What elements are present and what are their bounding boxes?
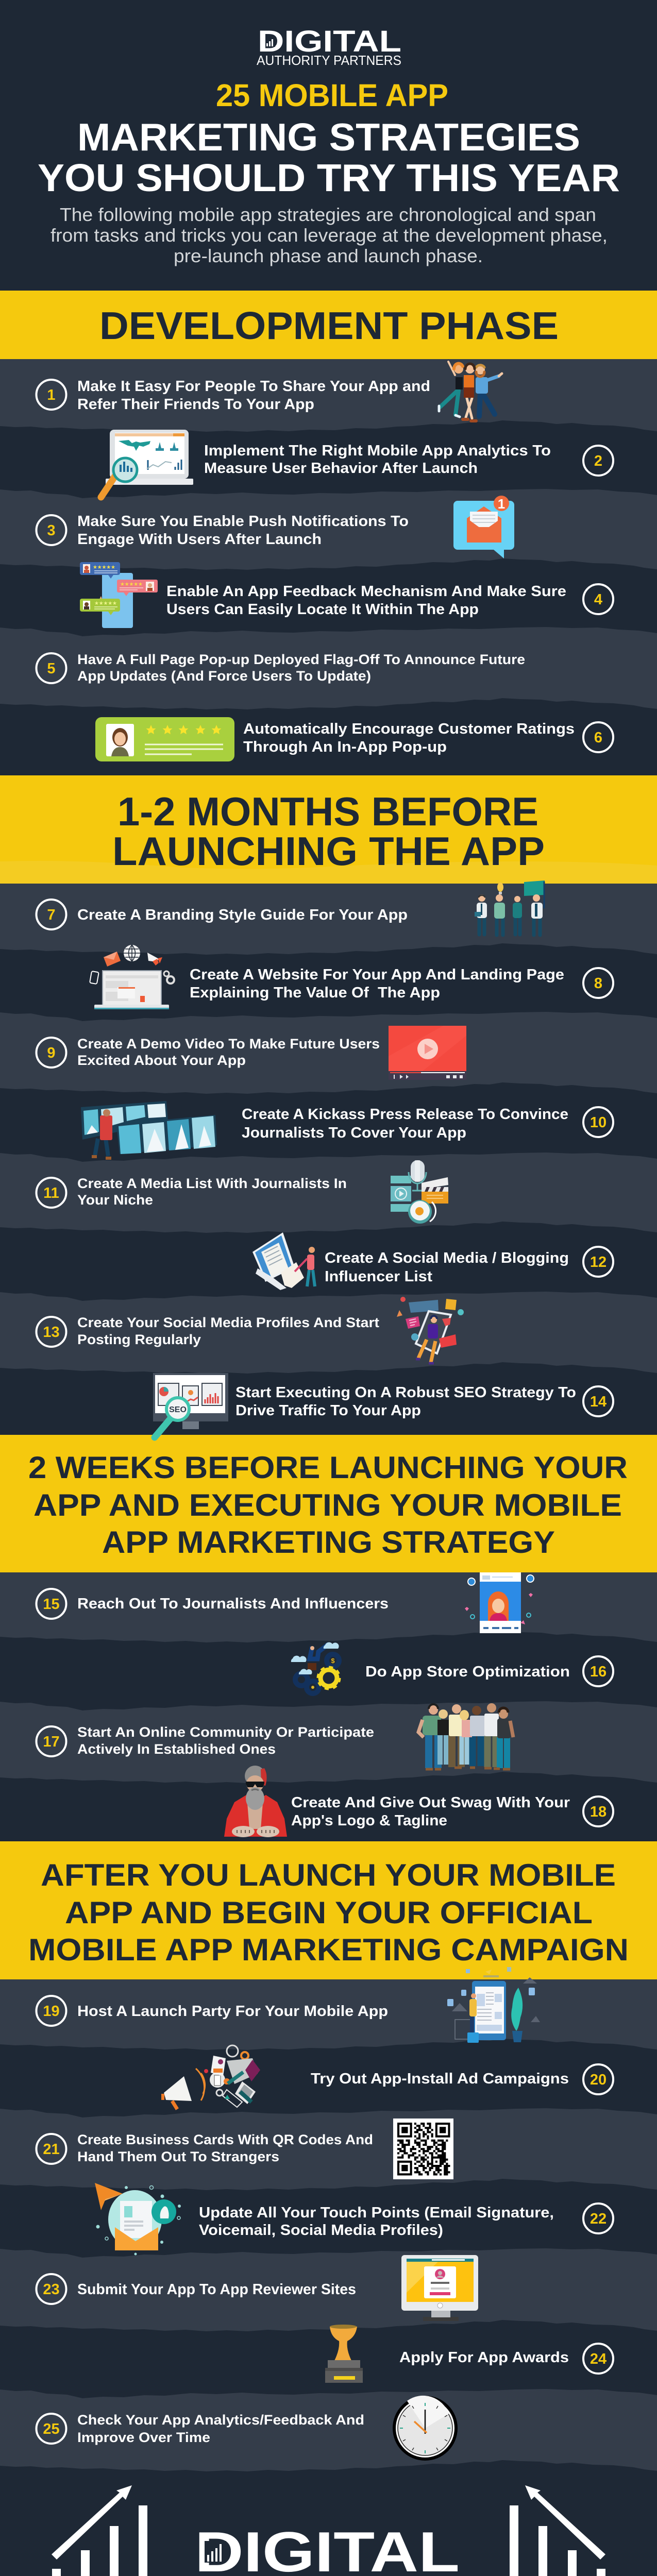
logo: header: DIGITAL	[258, 25, 401, 58]
text: strategy 11: Your Niche	[77, 1192, 153, 1208]
text: strategy 14	[235, 1384, 576, 1419]
text: strategy 21: Hand Them Out To Strangers	[77, 2149, 279, 2164]
number badge 20	[583, 2064, 613, 2094]
text: strategy 17	[77, 1724, 374, 1757]
heading: 2 weeks before launching	[0, 1435, 657, 1572]
number badge 16	[583, 1656, 613, 1686]
strategy 10	[81, 1101, 613, 1158]
text: strategy 25: Improve Over Time	[77, 2430, 210, 2445]
text: strategy 14: Start Executing On A Robust SEO Strategy To	[235, 1384, 576, 1401]
text: strategy 24: Apply For App Awards	[399, 2349, 569, 2366]
panel: development phase bands	[0, 359, 657, 776]
text: strategy 12: Influencer List	[325, 1268, 432, 1285]
number badge 21: 21	[43, 2141, 60, 2158]
number badge 6	[583, 722, 613, 752]
heading: development phase: DEVELOPMENT PHASE	[99, 304, 559, 347]
icon: QR code	[393, 2119, 453, 2179]
text: strategy 22: Update All Your Touch Points (Email Signature,	[199, 2205, 554, 2221]
icon: team with flag and bulb	[475, 880, 545, 935]
text: strategy 18	[291, 1794, 570, 1829]
number badge 12	[583, 1247, 613, 1277]
number badge 19	[36, 1996, 66, 2026]
text: strategy 7: Create A Branding Style Guide For Your App	[77, 907, 408, 923]
number badge 2: 2	[594, 453, 602, 469]
strategy 24	[325, 2325, 613, 2383]
icon: notification envelope bubble: 1	[498, 496, 505, 512]
number badge 18: 18	[590, 1804, 607, 1820]
text: strategy 9	[77, 1036, 380, 1068]
text: strategy 2: Measure User Behavior After Launch	[204, 460, 478, 477]
text: strategy 13: Create Your Social Media Profiles And Start	[77, 1315, 379, 1330]
icon: trophy	[325, 2325, 363, 2383]
strategy 12	[252, 1232, 613, 1290]
strategy 7	[36, 880, 545, 935]
text: strategy 22: Voicemail, Social Media Profiles)	[199, 2222, 443, 2239]
icon: laptop with analytics and magnifier	[101, 430, 193, 497]
intro paragraph: from tasks and tricks you can leverage at the development phase,	[50, 225, 608, 246]
text: strategy 8	[190, 967, 564, 1001]
heading: after you launch: MOBILE APP MARKETING CAMPAIGN	[28, 1933, 629, 1967]
icon: review site monitor	[401, 2255, 478, 2321]
icon: gears and clouds: $	[331, 1657, 335, 1665]
text: strategy 13: Posting Regularly	[77, 1332, 201, 1347]
number badge 23	[36, 2274, 66, 2304]
number badge 22: 22	[590, 2211, 607, 2227]
text: strategy 2	[204, 443, 551, 477]
text: strategy 8: Explaining The Value Of The App	[190, 985, 440, 1001]
intro paragraph: pre-launch phase and launch phase.	[174, 245, 483, 266]
panel: after launch bands	[0, 1979, 657, 2535]
number badge 17: 17	[43, 1734, 60, 1750]
title: main heading	[38, 115, 620, 199]
title: 25 mobile app: 25 MOBILE APP	[216, 78, 448, 113]
icon: phone with review cards: ★★★★★	[120, 582, 143, 587]
text: strategy 1	[77, 378, 430, 413]
number badge 11: 11	[43, 1185, 59, 1201]
text: strategy 6: Through An In-App Pop-up	[243, 739, 447, 755]
icon: bearded man in red hoodie	[224, 1766, 287, 1837]
icon: gears and clouds	[291, 1642, 340, 1693]
number badge 8	[583, 968, 613, 998]
text: strategy 4	[166, 583, 566, 618]
text: strategy 25	[77, 2412, 364, 2445]
icon: media mic, clapper and camera	[391, 1160, 448, 1224]
text: strategy 17: Actively In Established Ones	[77, 1741, 276, 1757]
text: strategy 5	[77, 652, 525, 684]
number badge 7: 7	[47, 907, 56, 923]
icon: SEO monitor and magnifier	[153, 1373, 228, 1437]
number badge 9: 9	[47, 1045, 56, 1061]
heading: 2 weeks before launching: APP AND EXECUTING YOUR MOBILE	[33, 1488, 622, 1522]
icon: mail, paper plane and bell	[95, 2183, 181, 2256]
text: strategy 3	[77, 513, 409, 548]
number badge 15	[36, 1589, 66, 1619]
text: strategy 10	[242, 1106, 568, 1141]
number badge 21	[36, 2134, 66, 2164]
footer chart: left bars and arrow	[52, 2485, 147, 2576]
number badge 15: 15	[43, 1596, 60, 1613]
text: strategy 5: Have A Full Page Pop-up Deployed Flag-Off To Announce Future	[77, 652, 525, 667]
strategy 11	[36, 1160, 448, 1224]
text: strategy 11	[77, 1176, 347, 1208]
number badge 20: 20	[590, 2072, 607, 2088]
text: strategy 11: Create A Media List With Journalists In	[77, 1176, 347, 1191]
strategy 21	[36, 2119, 453, 2179]
icon: phone with review cards: ★★★★★	[94, 601, 117, 606]
logo: header: AUTHORITY PARTNERS	[257, 53, 401, 68]
text: strategy 6	[243, 721, 575, 755]
heading: after you launch: AFTER YOU LAUNCH YOUR MOBILE	[41, 1858, 616, 1892]
text: strategy 22	[199, 2205, 554, 2239]
icon: phone with review cards	[80, 562, 158, 628]
icon: video player	[389, 1026, 466, 1080]
text: strategy 14: Drive Traffic To Your App	[235, 1402, 421, 1419]
icon: influencer profile card	[465, 1572, 534, 1633]
number badge 13: 13	[43, 1324, 60, 1341]
number badge 17	[36, 1726, 66, 1756]
text: strategy 8: Create A Website For Your App And Landing Page	[190, 967, 564, 983]
strategy 18	[224, 1766, 613, 1837]
heading: after you launch: APP AND BEGIN YOUR OFFICIAL	[65, 1895, 593, 1930]
number badge 2	[583, 446, 613, 476]
intro paragraph: The following mobile app strategies are chronological and span	[60, 204, 596, 225]
text: strategy 18: Create And Give Out Swag With Your	[291, 1794, 570, 1811]
strategy 19	[36, 1967, 540, 2043]
icon: launch party phone with plant	[447, 1967, 540, 2043]
strategy 20	[163, 2045, 613, 2109]
text: strategy 4: Users Can Easily Locate It Within The App	[166, 601, 479, 618]
number badge 24: 24	[590, 2351, 607, 2367]
footer chart: right bars and arrow	[510, 2485, 605, 2576]
icon: three happy friends	[439, 362, 502, 421]
icon: social media phone with person	[397, 1297, 464, 1363]
number badge 1	[36, 380, 66, 410]
text: strategy 18: App's Logo & Tagline	[291, 1812, 447, 1829]
number badge 8: 8	[594, 975, 602, 992]
icon: community group of people	[418, 1703, 513, 1769]
intro paragraph	[50, 204, 608, 266]
number badge 25: 25	[43, 2421, 60, 2437]
heading: 1-2 months before launching	[0, 775, 657, 884]
strategy 9	[36, 1026, 466, 1080]
number badge 19: 19	[43, 2003, 60, 2020]
strategy 23	[36, 2255, 478, 2321]
text: strategy 3: Engage With Users After Launch	[77, 531, 322, 548]
number badge 6: 6	[594, 730, 602, 746]
strategy 2	[101, 430, 613, 497]
strategy 15	[36, 1572, 534, 1633]
number badge 3	[36, 515, 66, 545]
strategy 13	[36, 1297, 464, 1363]
number badge 24	[583, 2344, 613, 2374]
number badge 10: 10	[590, 1114, 607, 1131]
text: strategy 20: Try Out App-Install Ad Campaigns	[311, 2071, 569, 2087]
text: strategy 5: App Updates (And Force Users To Update)	[77, 668, 371, 684]
number badge 13	[36, 1317, 66, 1347]
icon: blogging laptop and writer	[252, 1232, 315, 1290]
strategy 17	[36, 1703, 513, 1769]
text: strategy 1: Make It Easy For People To Share Your App and	[77, 378, 430, 395]
text: strategy 12: Create A Social Media / Blogging	[325, 1250, 569, 1266]
text: strategy 19: Host A Launch Party For Your Mobile App	[77, 2003, 388, 2020]
number badge 11	[36, 1178, 66, 1208]
strategy 16	[291, 1642, 613, 1693]
number badge 1: 1	[47, 387, 56, 403]
icon: customer rating card	[95, 717, 234, 761]
number badge 5	[36, 653, 66, 683]
text: strategy 4: Enable An App Feedback Mechanism And Make Sure	[166, 583, 566, 600]
number badge 4: 4	[594, 591, 602, 608]
number badge 7	[36, 900, 66, 929]
strategy 6	[95, 717, 613, 761]
number badge 14	[583, 1386, 613, 1416]
strategy 5	[36, 652, 525, 684]
panel: 1-2 months bands	[0, 883, 657, 1435]
panel: 2 weeks bands	[0, 1572, 657, 1842]
number badge 5: 5	[47, 660, 56, 677]
text: strategy 13	[77, 1315, 379, 1347]
logo: header	[257, 25, 401, 68]
text: strategy 25: Check Your App Analytics/Feedback And	[77, 2412, 364, 2428]
text: strategy 12	[325, 1250, 569, 1285]
number badge 9	[36, 1038, 66, 1067]
icon: website laptop with marketing icons	[90, 945, 174, 1009]
text: strategy 9: Excited About Your App	[77, 1053, 246, 1068]
title: main heading: YOU SHOULD TRY THIS YEAR	[38, 156, 620, 199]
strategy 1	[36, 362, 502, 421]
strategy 8	[90, 945, 613, 1009]
heading: development phase	[0, 291, 657, 359]
text: strategy 1: Refer Their Friends To Your App	[77, 396, 314, 413]
number badge 10	[583, 1107, 613, 1137]
text: strategy 16: Do App Store Optimization	[365, 1664, 570, 1680]
heading: 1-2 months before launching: 1-2 MONTHS BEFORE	[117, 789, 538, 834]
text: strategy 15: Reach Out To Journalists And Influencers	[77, 1596, 389, 1612]
text: strategy 23: Submit Your App To App Reviewer Sites	[77, 2281, 356, 2298]
text: strategy 21	[77, 2132, 373, 2164]
icon: film strips and photographer	[81, 1101, 217, 1158]
strategy 4	[80, 562, 613, 628]
strategy 22	[95, 2183, 613, 2256]
title: main heading: MARKETING STRATEGIES	[77, 115, 580, 159]
number badge 3: 3	[47, 522, 56, 539]
text: strategy 6: Automatically Encourage Customer Ratings	[243, 721, 575, 737]
strategy 3	[36, 496, 514, 558]
heading: after you launch	[0, 1841, 657, 1979]
number badge 14: 14	[590, 1394, 607, 1410]
strategy 25	[36, 2396, 458, 2461]
number badge 4	[583, 584, 613, 614]
strategy 14	[153, 1373, 613, 1437]
icon: advertising megaphone collage	[163, 2045, 260, 2109]
icon: wall clock	[393, 2396, 458, 2461]
text: strategy 9: Create A Demo Video To Make Future Users	[77, 1036, 380, 1052]
text: strategy 10: Create A Kickass Press Release To Convince	[242, 1106, 568, 1123]
icon: SEO monitor and magnifier: SEO	[169, 1405, 187, 1414]
text: strategy 10: Journalists To Cover Your App	[242, 1125, 466, 1141]
number badge 16: 16	[590, 1664, 607, 1680]
text: strategy 21: Create Business Cards With QR Codes And	[77, 2132, 373, 2147]
heading: 2 weeks before launching: APP MARKETING STRATEGY	[102, 1525, 555, 1560]
number badge 23: 23	[43, 2281, 60, 2298]
icon: notification envelope bubble	[453, 496, 514, 558]
text: strategy 2: Implement The Right Mobile App Analytics To	[204, 443, 551, 459]
icon: phone with review cards: ★★★★★	[93, 565, 115, 570]
heading: 1-2 months before launching: LAUNCHING THE APP	[112, 828, 545, 874]
heading: 2 weeks before launching: 2 WEEKS BEFORE LAUNCHING YOUR	[28, 1450, 628, 1485]
number badge 25	[36, 2414, 66, 2444]
text: strategy 17: Start An Online Community Or Participate	[77, 1724, 374, 1740]
number badge 18	[583, 1797, 613, 1826]
text: strategy 3: Make Sure You Enable Push Notifications To	[77, 513, 409, 530]
number badge 12: 12	[590, 1254, 607, 1270]
number badge 22	[583, 2204, 613, 2233]
